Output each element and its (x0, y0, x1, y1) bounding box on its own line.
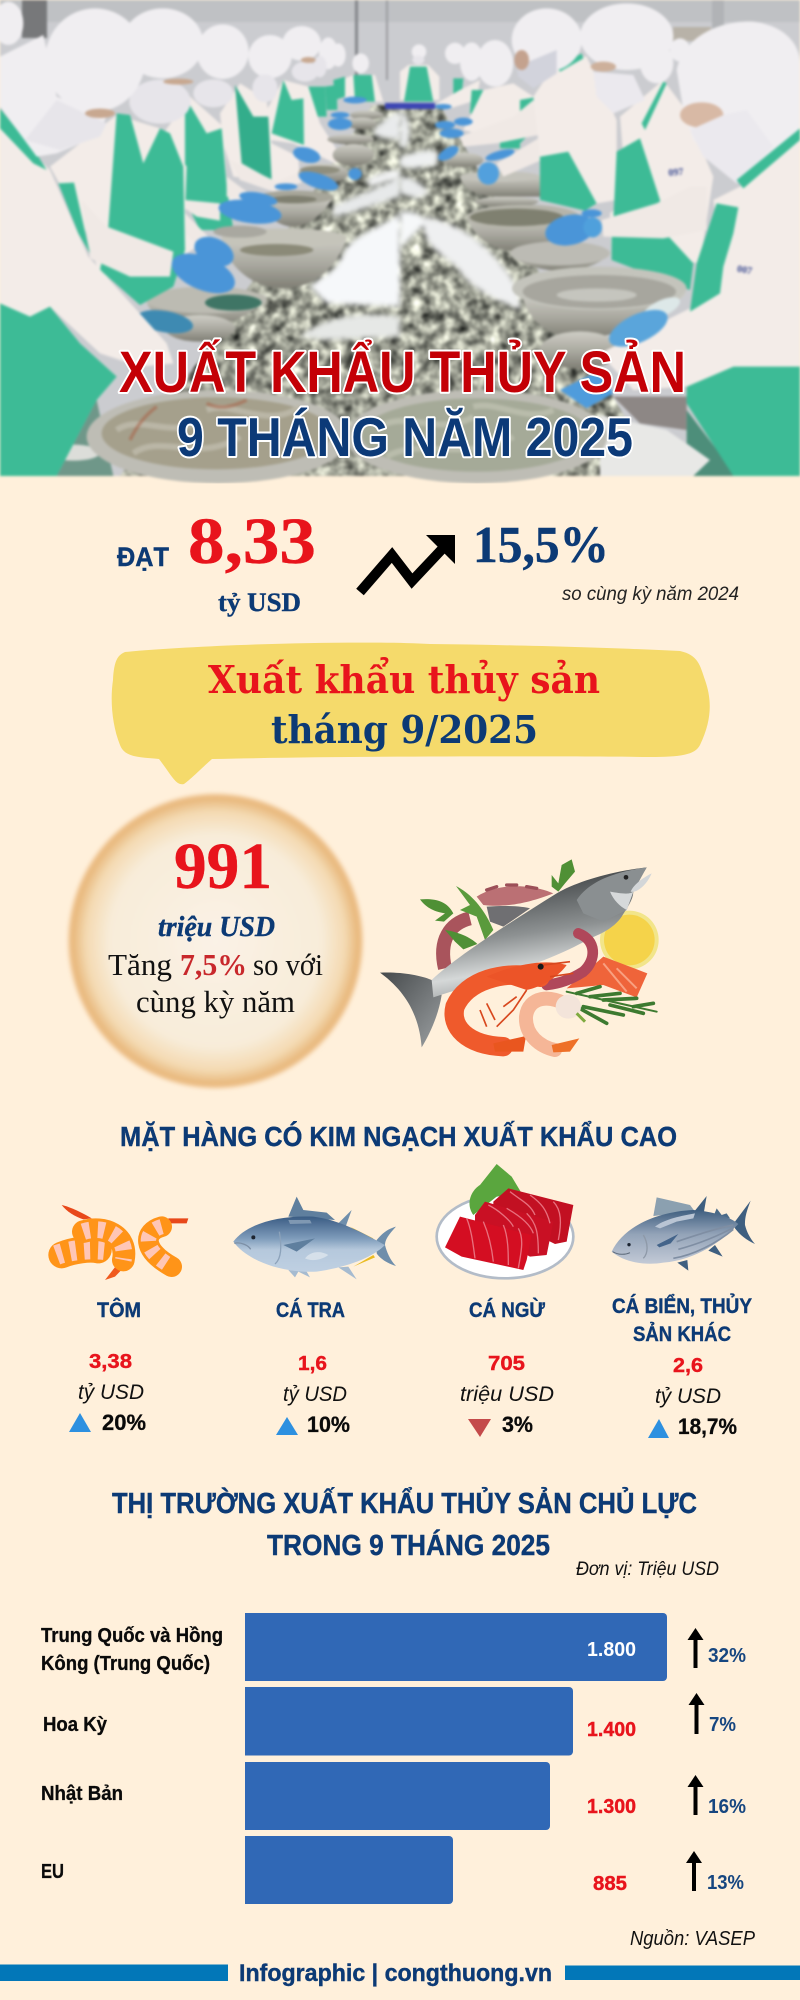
row: China and Hong Kong: Kông (Trung Quốc) (41, 1653, 210, 1675)
panel: pangasius product (233, 1197, 396, 1437)
rosemary (567, 987, 657, 1023)
bowls on the line (350, 110, 383, 120)
label (612, 1294, 752, 1346)
row: Japan: Nhật Bản (41, 1783, 123, 1805)
hero photo: shrimp processing line (0, 0, 800, 483)
change: 18,7% (678, 1414, 737, 1439)
row: EU (41, 1836, 744, 1904)
title (119, 340, 686, 468)
icon: up triangle (276, 1417, 298, 1435)
row: China and Hong Kong: 1.800 (587, 1639, 636, 1661)
gloves (343, 97, 367, 103)
row: China and Hong Kong: 32% (708, 1645, 746, 1667)
icon: up triangle (69, 1413, 91, 1432)
row: United States: 7% (709, 1714, 736, 1736)
icon: sashimi plate (437, 1164, 573, 1278)
illustration: seafood assortment (380, 859, 659, 1052)
panel: shrimp product (57, 1205, 188, 1435)
worker R3 (460, 100, 547, 147)
unit: tỷ USD (78, 1381, 144, 1404)
bowls mid (468, 213, 580, 252)
speech bubble (112, 643, 710, 784)
row: EU: 885 (593, 1873, 627, 1895)
row worker 1 (50, 115, 210, 280)
right side workers and bowls (346, 3, 800, 483)
label: CÁ BIỂN, THỦY (612, 1294, 752, 1318)
row: EU: 13% (707, 1872, 744, 1894)
right side workers and bowls: 007 (736, 264, 753, 277)
ice (400, 112, 520, 310)
row: Japan (41, 1762, 746, 1830)
right side workers and bowls: 097 (668, 167, 684, 179)
strainer right (522, 293, 687, 338)
label: SẢN KHÁC (633, 1323, 731, 1346)
prawn (454, 962, 573, 1052)
row: United States: 1.400 (587, 1719, 636, 1741)
panel: headline figures (117, 505, 739, 617)
figure: 15,5%: 15,5% (473, 517, 609, 574)
big shrimp bowl right (346, 390, 607, 483)
lemon (600, 911, 659, 969)
title line 1: XUẤT KHẨU THỦY SẢN (119, 340, 686, 405)
unit: tỷ USD: tỷ USD (218, 588, 301, 617)
row: EU: EU (41, 1861, 64, 1883)
unit: tỷ USD (655, 1385, 721, 1408)
icon: up triangle (648, 1419, 669, 1438)
banner line 2: tháng 9/2025 (271, 707, 538, 752)
heading: main markets (112, 1486, 697, 1562)
right row workers far (453, 78, 463, 95)
change: 10% (307, 1412, 350, 1437)
source: Nguồn: VASEP (630, 1928, 756, 1950)
value: 2,6 (673, 1355, 703, 1377)
small gloves (436, 143, 461, 164)
text: growth line 1: so với (253, 947, 323, 982)
left side workers and bowls (0, 2, 400, 483)
big shrimp bowl left (87, 390, 350, 483)
row: United States: Hoa Kỳ (43, 1714, 108, 1736)
text: growth line 1: Tăng (108, 947, 172, 982)
footer band (0, 1960, 800, 1987)
heading: main markets: THỊ TRƯỜNG XUẤT KHẨU THỦY SẢN CHỦ LỰC (112, 1486, 697, 1520)
row: China and Hong Kong (41, 1613, 746, 1681)
heading: top products: MẶT HÀNG CÓ KIM NGẠCH XUẤT KHẨU CAO (120, 1121, 677, 1152)
fish (380, 867, 652, 1047)
row worker 6 (333, 77, 345, 100)
far worker (345, 75, 383, 102)
value: 1,6 (298, 1353, 327, 1375)
row worker 2 (163, 97, 245, 203)
row worker 5 (325, 85, 337, 110)
pale prawn (526, 995, 585, 1052)
unit: tỷ USD (283, 1383, 347, 1406)
note: unit: Đơn vị: Triệu USD (576, 1559, 719, 1580)
label: TÔM (97, 1298, 141, 1322)
bar chart: markets (41, 1613, 746, 1904)
unit: triệu USD (460, 1383, 554, 1406)
text: growth line 2: cùng kỳ năm (136, 984, 295, 1019)
panel: other seafood product (612, 1196, 755, 1439)
salmon (567, 957, 647, 997)
row: United States (43, 1687, 736, 1756)
text: growth line 1 (108, 947, 323, 982)
panel: tuna product (437, 1164, 573, 1437)
label: CÁ TRA (276, 1299, 345, 1322)
value: 3,38 (89, 1351, 132, 1373)
label: CÁ NGỪ (469, 1298, 546, 1322)
panel: september figure circle (68, 794, 362, 1088)
value: 705 (488, 1353, 525, 1375)
worker R1 (687, 337, 800, 476)
icon: fish (233, 1197, 396, 1279)
floor (57, 400, 113, 476)
figure: 8,33: 8,33 (188, 505, 316, 578)
figure: 991: 991 (174, 830, 272, 903)
icon: down triangle (468, 1419, 491, 1437)
change: 3% (502, 1412, 533, 1437)
title line 2: 9 THÁNG NĂM 2025 (177, 406, 633, 468)
footer text: Infographic | congthuong.vn (239, 1960, 552, 1987)
far center worker (400, 65, 439, 100)
icon: shrimp (57, 1205, 188, 1280)
banner line 1: Xuất khẩu thủy sản (208, 657, 600, 702)
conveyor with shrimp and ice (120, 105, 660, 476)
glowing circle (68, 794, 362, 1088)
worker R2 (610, 80, 713, 263)
bowl (460, 175, 540, 197)
label: đạt: ĐẠT (117, 542, 169, 572)
row: Japan: 16% (708, 1796, 746, 1818)
note: compared to 2024: so cùng kỳ năm 2024 (562, 584, 739, 605)
tentacle over fish (547, 933, 593, 985)
text: growth line 1: 7,5% (180, 947, 247, 982)
row: Japan: 1.300 (587, 1796, 636, 1818)
unit: triệu USD: triệu USD (158, 911, 275, 943)
row worker 4 (267, 80, 343, 163)
icon: bonito (612, 1196, 755, 1271)
icon: rising arrow (360, 535, 455, 592)
row worker 3 (220, 83, 300, 182)
nearest left worker (0, 2, 23, 45)
callout: september banner (112, 643, 710, 784)
row: China and Hong Kong: Trung Quốc và Hồng (41, 1625, 223, 1647)
change: 20% (102, 1410, 146, 1435)
ice (300, 112, 400, 340)
heading: main markets: TRONG 9 THÁNG 2025 (267, 1528, 550, 1562)
herbs (420, 899, 453, 922)
octopus (477, 886, 553, 906)
